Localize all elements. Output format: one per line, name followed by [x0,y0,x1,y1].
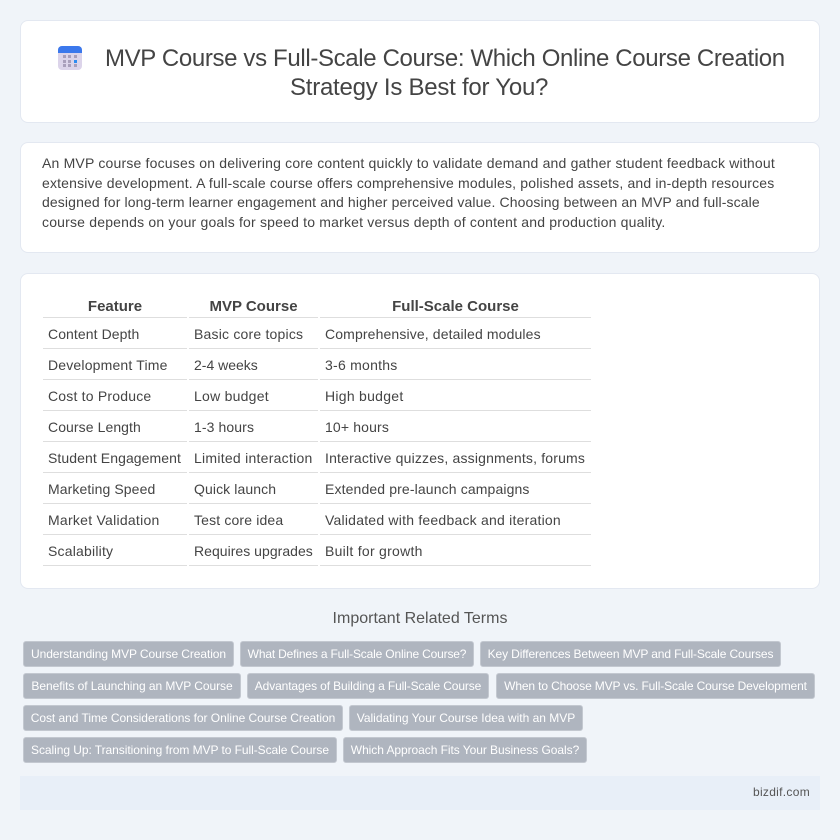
tags: related terms: When to Choose MVP vs. Full-Scale Course Development [504,679,807,693]
panel: title header [20,20,820,123]
table: Built for growth [325,543,423,559]
tags: related terms: Understanding MVP Course Creation [31,647,226,661]
footer bar [20,776,820,810]
table: Limited interaction [194,450,313,466]
table header [88,298,519,315]
table: Basic core topics [194,326,303,342]
panel: introduction [20,142,820,253]
intro text [42,155,775,230]
table: Validated with feedback and iteration [325,512,561,528]
table header: MVP Course [209,298,298,315]
tags: related terms: Key Differences Between MVP and Full-Scale Courses [488,647,773,661]
table: High budget [325,388,403,404]
tags: related terms: Which Approach Fits Your Business Goals? [351,743,579,757]
table: Development Time [48,357,168,373]
table: Marketing Speed [48,481,155,497]
table: 10+ hours [325,419,389,435]
table: 2-4 weeks [194,357,258,373]
table: Content Depth [48,326,139,342]
table: Comprehensive, detailed modules [325,326,541,342]
table: Course Length [48,419,141,435]
table: Cost to Produce [48,388,151,404]
tags: related terms: Benefits of Launching an MVP Course [31,679,233,693]
tags: related terms: Advantages of Building a Full-Scale Course [255,679,481,693]
table: Quick launch [194,481,276,497]
title: Strategy Is Best for You? [290,74,548,101]
table: Interactive quizzes, assignments, forums [325,450,585,466]
icon: calendar [58,46,82,70]
table: Student Engagement [48,450,181,466]
tags: related terms: What Defines a Full-Scale Online Course? [248,647,466,661]
tags: related terms: Validating Your Course Idea with an MVP [357,711,575,725]
title [105,45,785,101]
table: 1-3 hours [194,419,254,435]
tags: related terms: Cost and Time Considerations for Online Course Creation [31,711,335,725]
table [43,298,591,566]
table header: Feature [88,298,142,315]
footer source: bizdif.com [753,785,810,799]
intro text: designed for long-term learner engagement and higher perceived value. Choosing between an MVP and full-scale [42,194,760,210]
intro text: course depends on your goals for speed to market versus depth of content and production quality. [42,214,665,230]
title: MVP Course vs Full-Scale Course: Which Online Course Creation [105,45,785,72]
table header: Full-Scale Course [392,298,519,315]
table: Test core idea [194,512,283,528]
tags: related terms: Scaling Up: Transitioning from MVP to Full-Scale Course [31,743,329,757]
intro text: extensive development. A full-scale course offers comprehensive modules, polished assets, and in-depth resources [42,175,774,191]
panel: comparison table [20,273,820,589]
table: 3-6 months [325,357,398,373]
table: Requires upgrades [194,543,313,559]
table: Extended pre-launch campaigns [325,481,530,497]
heading: related terms: Important Related Terms [333,610,507,627]
table: Scalability [48,543,113,559]
table: Low budget [194,388,269,404]
table: Market Validation [48,512,160,528]
tags: related terms [23,641,815,763]
intro text: An MVP course focuses on delivering core content quickly to validate demand and gather student feedback without [42,155,775,171]
